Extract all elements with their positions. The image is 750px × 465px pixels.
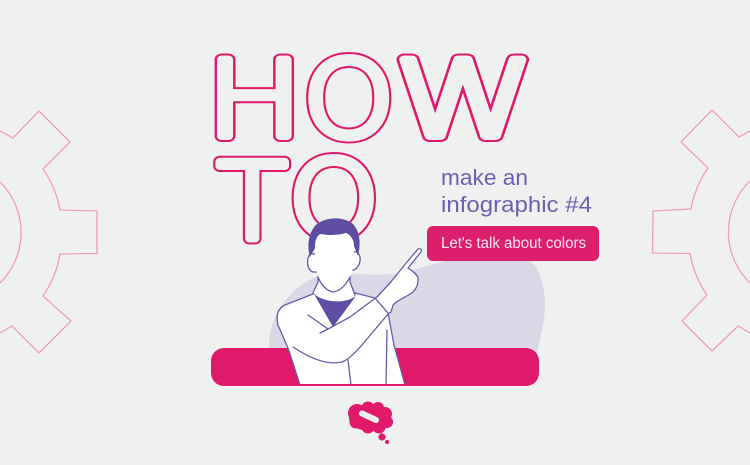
- face: [315, 233, 354, 292]
- jaw line: [318, 277, 350, 292]
- heading outline: [206, 38, 534, 263]
- neck: [313, 270, 355, 301]
- heading outline: O: [289, 138, 379, 261]
- text: make an infographic #4: [441, 165, 592, 217]
- text: make an infographic #4: infographic #4: [441, 192, 592, 217]
- illustration: man pointing: [277, 218, 421, 385]
- pink line under man: [299, 384, 406, 386]
- heading inner: O: [303, 40, 394, 162]
- badge: Let's talk about colors: Let's talk about colors: [441, 235, 586, 252]
- heading outline: O: [303, 40, 394, 162]
- heading outline: T: [217, 141, 287, 263]
- jacket: [277, 293, 405, 385]
- heading inner: [206, 38, 534, 263]
- pink bar: [211, 348, 539, 386]
- icon: brain logo: [348, 402, 393, 444]
- hair: [308, 218, 360, 257]
- icon: right gear: [652, 110, 750, 351]
- icon: left gear: [0, 111, 97, 353]
- arm lines: [293, 249, 421, 385]
- heading inner: W: [395, 40, 534, 161]
- heading outline: H: [206, 38, 303, 161]
- lavender blob: [269, 255, 545, 355]
- heading inner: O: [289, 138, 379, 261]
- text: make an infographic #4: make an: [441, 165, 528, 190]
- badge: Let's talk about colors: [427, 226, 599, 261]
- heading outline: W: [395, 40, 534, 161]
- ears: [308, 252, 360, 272]
- title: HOW TO: [206, 38, 534, 263]
- arm and hand: [288, 249, 421, 363]
- shirt: [314, 294, 356, 327]
- heading inner: T: [217, 141, 287, 263]
- heading inner: H: [206, 38, 303, 161]
